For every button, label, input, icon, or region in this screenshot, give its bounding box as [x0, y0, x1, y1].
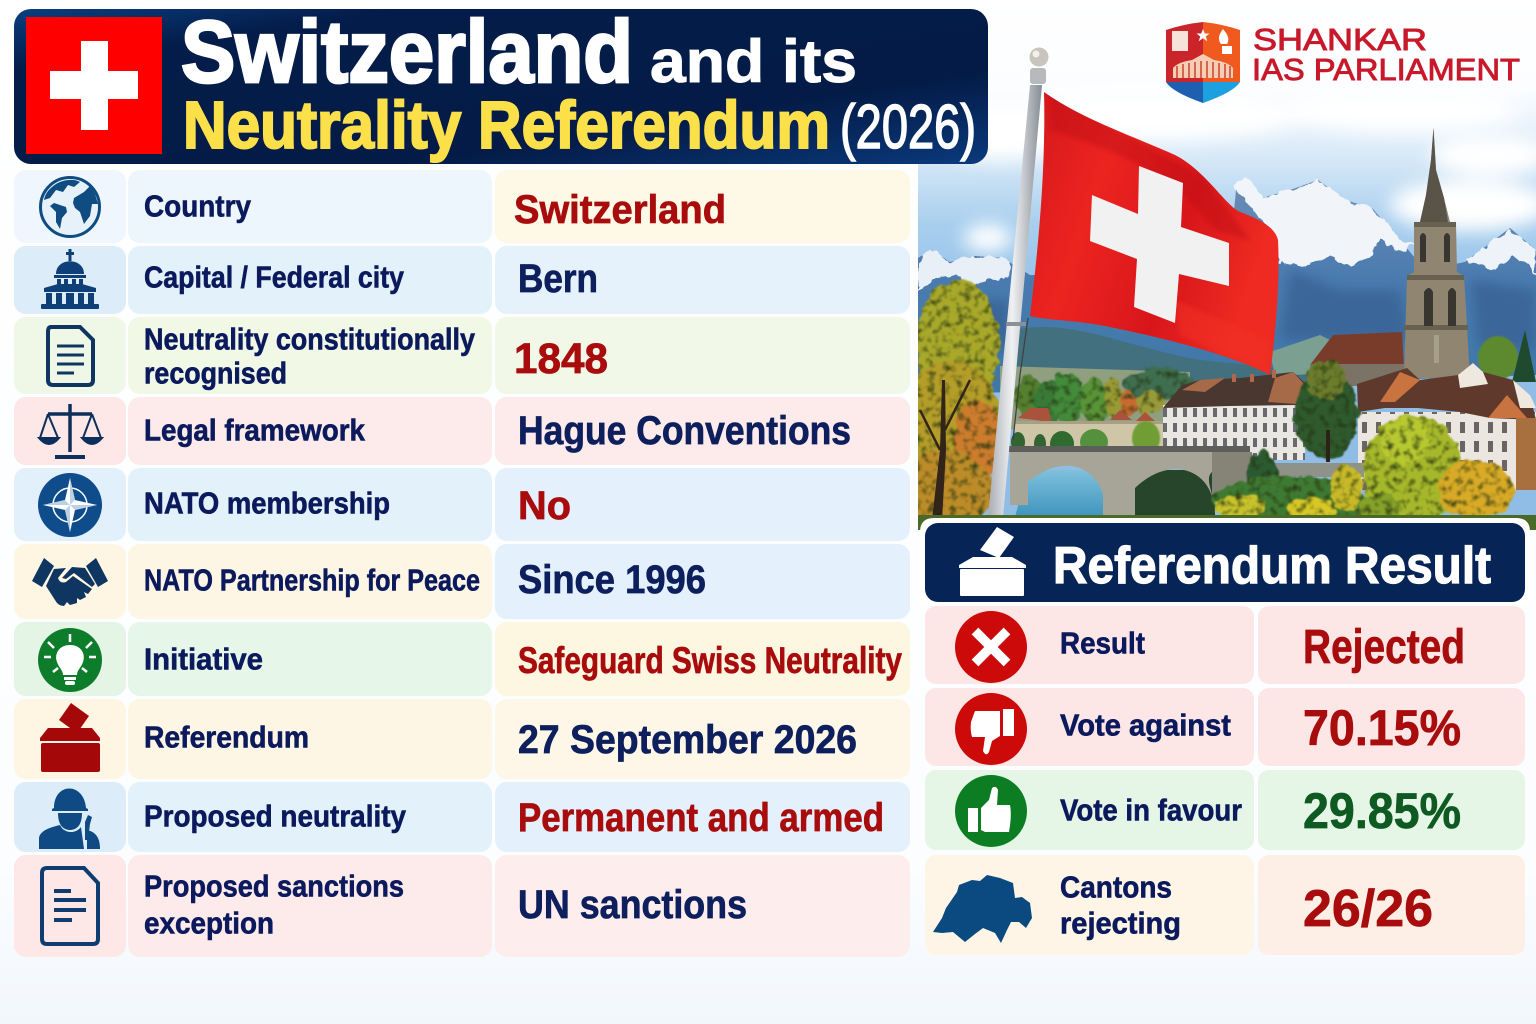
icon: white ballot box	[959, 527, 1026, 596]
value: Rejected	[1303, 621, 1465, 674]
table row: Proposed sanctions exception	[14, 855, 910, 957]
label: Legal framework	[144, 412, 366, 448]
logo: Shankar IAS Parliament	[1166, 22, 1520, 103]
value: No	[518, 484, 571, 528]
icon: scales of justice	[39, 404, 102, 457]
icon: document	[48, 327, 93, 385]
label: NATO membership	[144, 486, 390, 520]
distant town band	[1000, 366, 1190, 430]
label line 2: exception	[144, 906, 274, 940]
title text: Neutrality Referendum	[183, 88, 830, 163]
label: Cantons	[1060, 870, 1172, 904]
result row: Vote in favour	[925, 770, 1525, 850]
icon: red ballot box	[40, 703, 100, 772]
value: UN sanctions	[518, 883, 747, 927]
title text: Switzerland	[181, 2, 633, 101]
result row: Vote against	[925, 688, 1525, 766]
logo wordmark	[1252, 22, 1520, 87]
flag icon: Swiss flag square	[26, 17, 162, 154]
river	[1016, 470, 1103, 515]
mountains	[918, 177, 1536, 395]
icon: NATO compass	[38, 473, 102, 537]
label: Proposed sanctions	[144, 868, 404, 904]
label: Capital / Federal city	[144, 260, 405, 294]
table row: Neutrality constitutionally recognised	[14, 317, 910, 394]
label: Neutrality constitutionally	[144, 322, 476, 356]
label: Proposed neutrality	[144, 798, 407, 834]
header banner	[14, 2, 988, 164]
label: Country	[144, 188, 252, 224]
houses centre	[1163, 370, 1305, 460]
Swiss flag	[1030, 90, 1279, 375]
distant trees	[1016, 368, 1196, 426]
icon: light bulb	[38, 628, 102, 692]
flagpole	[988, 48, 1048, 517]
label: Initiative	[144, 642, 263, 676]
icon: thumbs up	[955, 775, 1027, 847]
value: 70.15%	[1303, 700, 1461, 756]
label: Result	[1060, 626, 1145, 660]
yellow-green tree right	[1358, 415, 1514, 525]
value: Safeguard Swiss Neutrality	[518, 640, 902, 681]
label: Vote against	[1060, 708, 1231, 742]
icon: map of Switzerland	[933, 875, 1032, 943]
label line 2: recognised	[144, 356, 287, 390]
table row: Legal framework	[14, 397, 910, 465]
title text: (2026)	[840, 93, 976, 162]
table row: Referendum	[14, 699, 910, 779]
heading text: Referendum Result	[1053, 537, 1491, 595]
value: Permanent and armed	[518, 796, 884, 840]
icon: thumbs down	[955, 693, 1027, 765]
green foothills	[1016, 327, 1308, 384]
cathedral	[1310, 128, 1470, 386]
table row: Proposed neutrality	[14, 782, 910, 852]
value: 1848	[514, 335, 608, 383]
table row: NATO membership	[14, 468, 910, 541]
icon: soldier	[39, 788, 100, 849]
icon: document with lines	[42, 868, 98, 944]
scenic photo: Bern with Alps	[918, 48, 1536, 530]
panel: referendum result	[920, 518, 1530, 955]
value: 27 September 2026	[518, 718, 857, 762]
far right trees	[1478, 330, 1536, 382]
result row: Cantons rejecting	[925, 855, 1525, 955]
clouds	[930, 88, 1536, 252]
value: 26/26	[1303, 880, 1433, 938]
embankment wall	[1274, 463, 1364, 477]
panel heading	[925, 523, 1525, 602]
icon: globe	[40, 178, 100, 236]
label: Referendum	[144, 720, 309, 754]
snow caps	[918, 177, 1536, 292]
value: Since 1996	[518, 558, 706, 602]
mountain shading	[940, 270, 1536, 350]
rear bridge	[1011, 420, 1163, 446]
label: NATO Partnership for Peace	[144, 562, 480, 598]
icon: red cross	[955, 611, 1027, 683]
embankment foliage	[1210, 448, 1366, 515]
table row: NATO Partnership for Peace	[14, 544, 910, 619]
houses right	[1357, 363, 1536, 490]
logo wordmark: SHANKAR	[1253, 22, 1427, 57]
green tree centre	[1295, 360, 1359, 462]
dark foliage under second arch	[1130, 470, 1215, 517]
distant red roofs	[1018, 408, 1156, 422]
value: Bern	[518, 257, 598, 301]
table row: Initiative	[14, 622, 910, 696]
scene foreground strip	[918, 515, 1536, 530]
label: Vote in favour	[1060, 792, 1242, 828]
result row: Result	[925, 606, 1525, 684]
logo wordmark: IAS PARLIAMENT	[1252, 52, 1520, 87]
value: Switzerland	[514, 188, 726, 232]
value: Hague Conventions	[518, 409, 851, 453]
table row: Country	[14, 170, 910, 243]
icon: capitol building	[41, 249, 99, 309]
value: 29.85%	[1303, 783, 1461, 839]
table row: Capital	[14, 246, 910, 314]
icon: shield	[1166, 22, 1240, 103]
label line 2: rejecting	[1060, 906, 1181, 940]
autumn tree left	[918, 278, 1002, 515]
title text: and its	[650, 28, 857, 95]
stone bridge	[1010, 452, 1212, 515]
title text	[181, 2, 976, 163]
icon: handshake	[32, 558, 108, 606]
